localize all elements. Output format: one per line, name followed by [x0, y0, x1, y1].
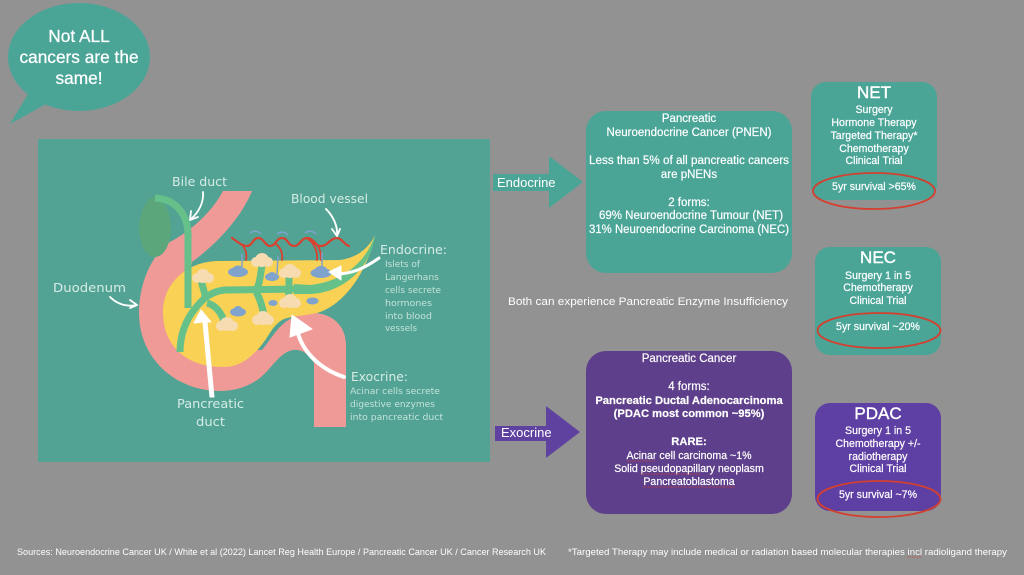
- arrow: exocrine: [495, 406, 580, 458]
- panel: pancreatic cancer: [586, 351, 792, 514]
- card: NET: Hormone Therapy: [831, 117, 917, 129]
- card: NEC: Chemotherapy: [843, 282, 913, 294]
- white arrow: bile duct: [190, 192, 203, 220]
- survival ellipse: [818, 481, 940, 517]
- card: PDAC: Chemotherapy +/-: [835, 438, 921, 450]
- white arrow: exocrine: [290, 315, 344, 377]
- panel: pancreatic cancer: (PDAC most common ~95%): [614, 408, 765, 420]
- panel: pancreatic neuroendocrine cancer: 31% Neuroendocrine Carcinoma (NEC): [589, 224, 789, 236]
- gallbladder: [139, 197, 171, 257]
- duodenum: [139, 191, 346, 427]
- panel: pancreatic cancer: Solid pseudopapillary neoplasm: [614, 463, 764, 475]
- panel: pancreatic cancer: Acinar cell carcinoma ~1%: [626, 450, 752, 462]
- panel: pancreatic cancer: RARE:: [671, 436, 707, 448]
- white arrow: blood vessel: [326, 209, 340, 236]
- label: endocrine description: into blood: [385, 312, 432, 322]
- card: NET: 5yr survival >65%: [832, 181, 917, 193]
- panel: pancreatic neuroendocrine cancer: Pancreatic: [662, 113, 716, 125]
- card: NET: NET: [857, 83, 891, 102]
- card: NEC: [815, 247, 941, 355]
- blood vessel: [232, 238, 349, 260]
- bile and pancreatic ducts: [155, 198, 375, 352]
- label: exocrine description: into pancreatic duct: [350, 413, 444, 423]
- acinar cells: [192, 253, 301, 331]
- panel: pancreatic neuroendocrine cancer: Neuroendocrine Cancer (PNEN): [607, 127, 772, 139]
- card: PDAC: Surgery 1 in 5: [845, 425, 911, 437]
- panel: pancreatic cancer: 4 forms:: [668, 381, 710, 393]
- card: PDAC: Clinical Trial: [849, 463, 907, 475]
- label: endocrine description: cells secrete: [385, 286, 441, 296]
- label: endocrine description: Endocrine:: [380, 243, 447, 257]
- survival ellipse: [818, 313, 940, 348]
- speech bubble: Not ALL cancers are the same: same!: [55, 68, 103, 88]
- card: NET: Surgery: [855, 104, 893, 116]
- panel: pancreatic neuroendocrine cancer: Less than 5% of all pancreatic cancers: [589, 155, 789, 167]
- label: pancreatic duct: Pancreatic: [177, 397, 244, 411]
- speech bubble: Not ALL cancers are the same: cancers are the: [19, 47, 139, 67]
- label: blood vessel: Blood vessel: [291, 192, 368, 206]
- label: pancreatic duct: duct: [196, 415, 225, 429]
- text: enzyme insufficiency note: Both can experience Pancreatic Enzyme Insufficiency: [508, 296, 788, 308]
- panel: pancreatic cancer: Pancreatic Ductal Adenocarcinoma: [595, 395, 783, 407]
- label: endocrine description: Islets of: [385, 260, 421, 270]
- white arrow: endocrine: [329, 258, 379, 280]
- label: endocrine description: Langerhans: [385, 273, 440, 283]
- panel: pancreas anatomy diagram: [38, 139, 490, 462]
- label: bile duct: Bile duct: [172, 175, 227, 189]
- label: endocrine description: hormones: [385, 299, 433, 309]
- arrow: exocrine: Exocrine: [501, 425, 552, 440]
- card: NEC: Surgery 1 in 5: [845, 270, 911, 282]
- pancreas body: [163, 235, 375, 367]
- panel: pancreatic neuroendocrine cancer: 69% Neuroendocrine Tumour (NET): [599, 210, 783, 222]
- label: exocrine description: Acinar cells secrete: [350, 387, 440, 397]
- label: exocrine description: [350, 370, 444, 423]
- panel: pancreatic neuroendocrine cancer: [586, 111, 792, 273]
- label: duodenum: Duodenum: [53, 281, 126, 295]
- card: NEC: NEC: [860, 248, 896, 267]
- card: NET: [811, 82, 937, 209]
- footer: sources: Sources: Neuroendocrine Cancer UK / White et al (2022) Lancet Reg Health Europe / Pancreatic Cancer UK / Cancer Research UK: [17, 547, 546, 557]
- survival ellipse: [813, 173, 935, 209]
- footer: targeted therapy note: *Targeted Therapy may include medical or radiation based molecular therapies incl radioligand therapy: [568, 547, 1008, 557]
- card: NET: Clinical Trial: [845, 155, 903, 167]
- speech bubble: Not ALL cancers are the same: Not ALL: [48, 26, 110, 46]
- card: NET: Chemotherapy: [839, 143, 909, 155]
- card: PDAC: [815, 403, 941, 517]
- panel: pancreatic cancer: Pancreatic Cancer: [642, 353, 736, 365]
- white arrow: duodenum: [110, 297, 137, 308]
- panel: pancreatic neuroendocrine cancer: 2 forms:: [668, 197, 710, 209]
- card: NEC: Clinical Trial: [849, 295, 907, 307]
- card: PDAC: 5yr survival ~7%: [839, 489, 918, 501]
- label: pancreatic duct: [177, 397, 244, 429]
- arrow: endocrine: [493, 156, 583, 208]
- card: NET: Targeted Therapy*: [831, 130, 917, 142]
- card: NEC: 5yr survival ~20%: [836, 321, 921, 333]
- label: exocrine description: digestive enzymes: [350, 400, 436, 410]
- panel: pancreatic neuroendocrine cancer: are pNENs: [661, 169, 717, 181]
- speech bubble: Not ALL cancers are the same: [8, 3, 150, 124]
- panel: pancreatic cancer: Pancreatoblastoma: [643, 476, 735, 488]
- white arrow: pancreatic duct: [194, 310, 214, 397]
- arrow: endocrine: Endocrine: [497, 175, 556, 190]
- card: PDAC: radiotherapy: [849, 451, 908, 463]
- islets: blue endocrine cells: [228, 266, 332, 316]
- label: endocrine description: [380, 243, 447, 334]
- small blue hormone arrows: [242, 231, 322, 274]
- card: PDAC: PDAC: [854, 404, 902, 423]
- label: exocrine description: Exocrine:: [351, 370, 408, 384]
- label: endocrine description: vessels: [385, 324, 418, 334]
